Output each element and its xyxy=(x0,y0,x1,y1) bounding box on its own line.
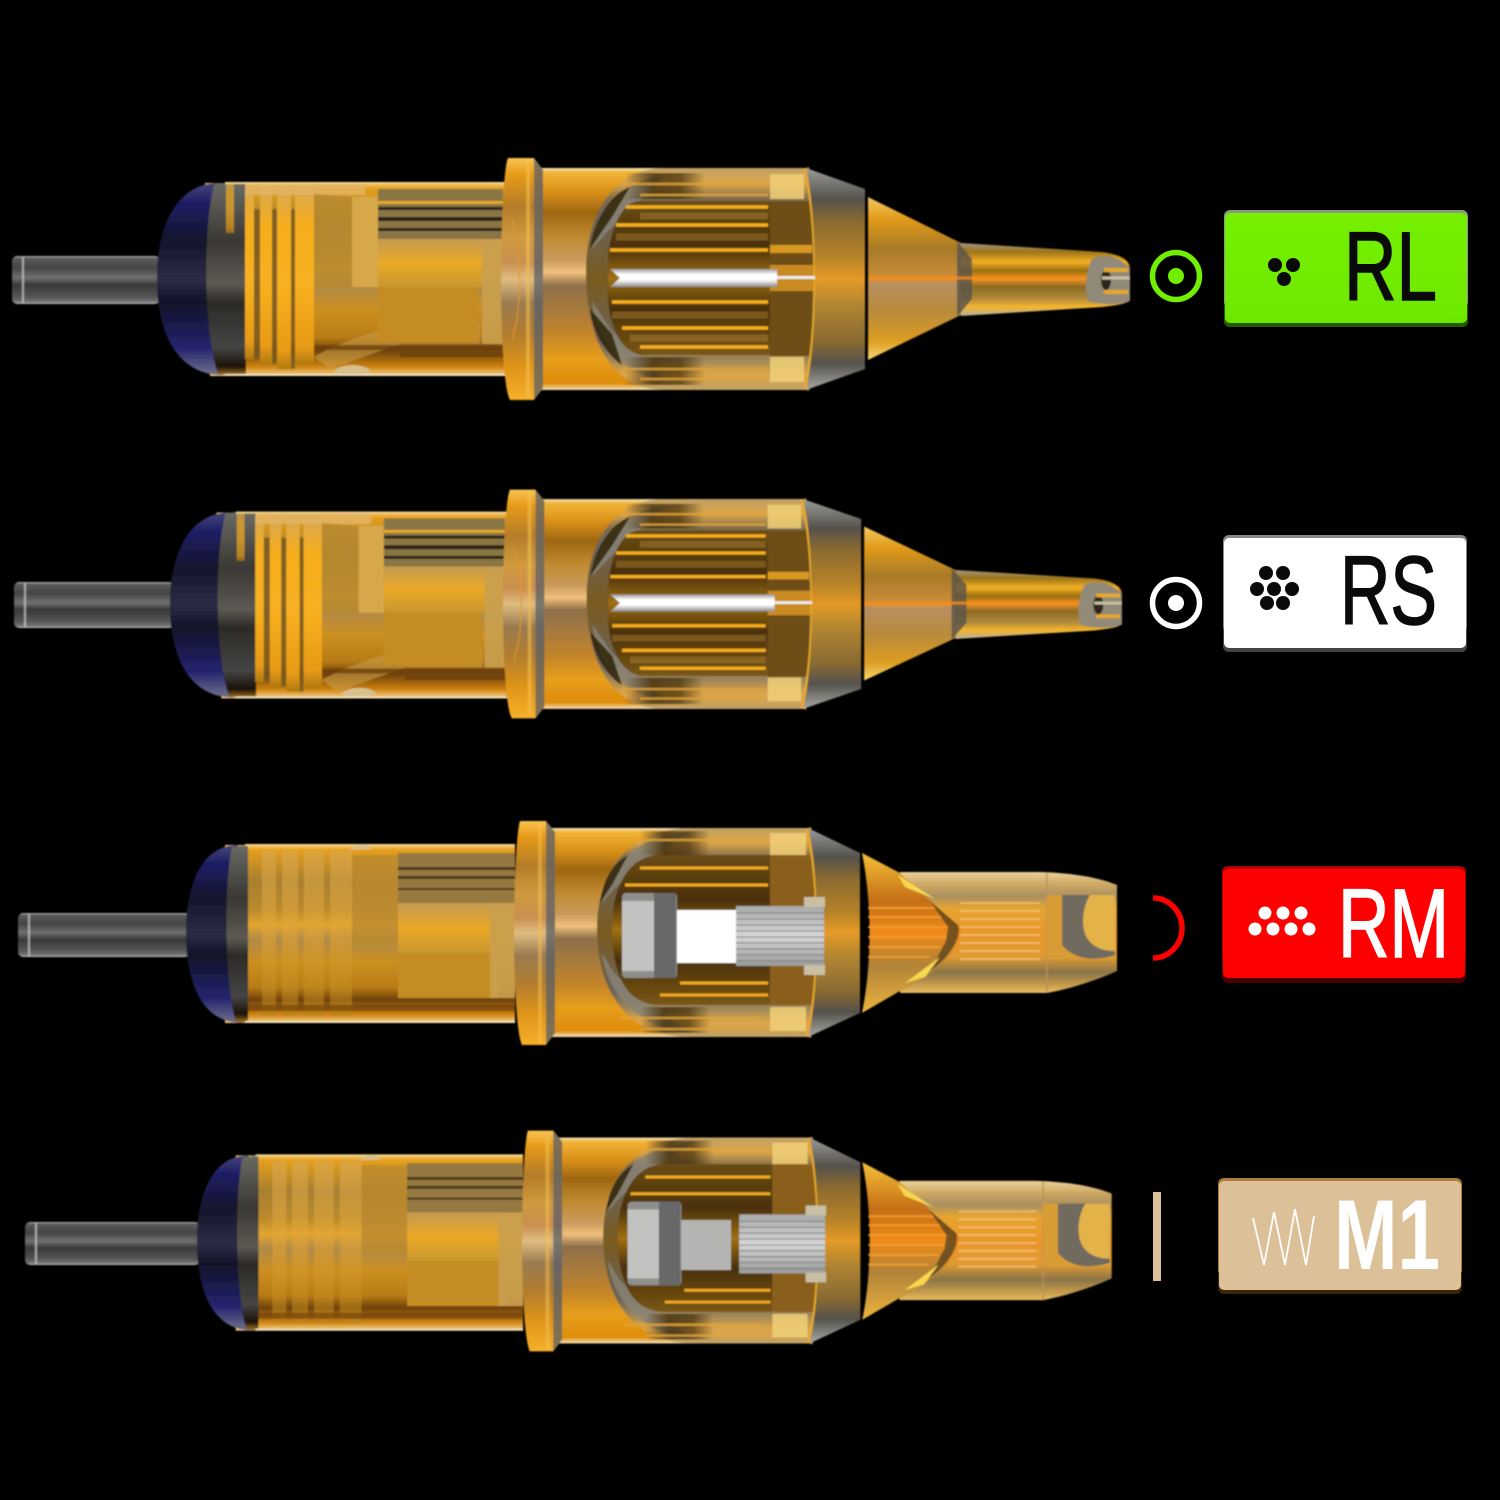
cartridge: RS round shader xyxy=(14,490,1122,718)
icon: M1 straight line symbol xyxy=(1153,1192,1161,1281)
badge: RM: RM xyxy=(1338,869,1449,978)
badge: RS xyxy=(1223,535,1467,652)
badge: M1 xyxy=(1218,1178,1462,1294)
icon: RS round tip symbol xyxy=(1152,580,1200,626)
icon: RM curved arc symbol xyxy=(1153,898,1182,958)
cartridge: M1 magnum xyxy=(25,1131,1112,1351)
badge: RL xyxy=(1224,210,1468,327)
badge: RM xyxy=(1222,866,1466,983)
badge: M1: M1 xyxy=(1334,1179,1440,1290)
cartridge: RL round liner xyxy=(12,158,1130,400)
cartridge: RM curved magnum xyxy=(18,821,1117,1045)
badge: RS: RS xyxy=(1340,536,1437,645)
icon: RL round tip symbol xyxy=(1152,252,1200,300)
badge: RL: RL xyxy=(1344,212,1437,321)
